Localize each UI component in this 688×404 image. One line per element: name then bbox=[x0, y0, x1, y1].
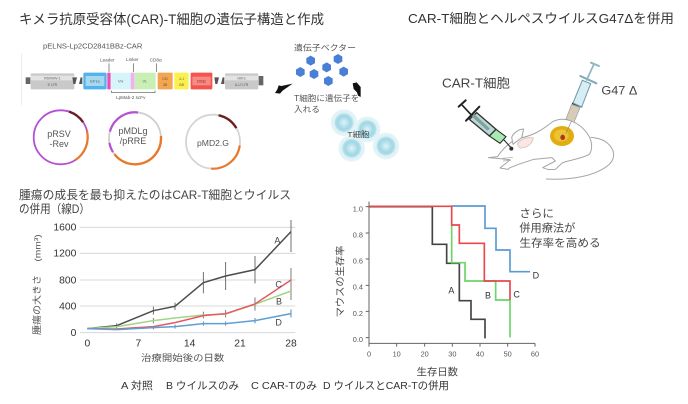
y axis labels bbox=[53, 222, 77, 339]
title: CAR construct: キメラ抗原受容体(CAR)-T細胞の遺伝子構造と作成 bbox=[19, 11, 324, 27]
callout: 生存率を高める bbox=[519, 237, 601, 250]
heading: tumor growth: の併用（線D） bbox=[19, 202, 90, 216]
legend caption: D ウイルスとCAR-Tの併用 bbox=[323, 379, 449, 392]
vector particles bbox=[296, 54, 348, 86]
x axis labels bbox=[84, 338, 297, 349]
legend caption bbox=[121, 379, 449, 392]
segment labels: Leader bbox=[100, 57, 115, 62]
curve C bbox=[369, 206, 510, 300]
curve A bbox=[369, 207, 485, 338]
CAR segments: CD bbox=[162, 77, 168, 81]
x axis title: 治療開始後の日数 bbox=[141, 352, 225, 363]
y ticks: 0.0 bbox=[353, 335, 363, 344]
y axis title: マウスの生存率 bbox=[334, 245, 346, 317]
EF1a promoter: EF1a bbox=[90, 79, 101, 84]
y axis title bbox=[31, 234, 43, 335]
arrow: into T cell bbox=[353, 82, 361, 97]
axes bbox=[366, 202, 535, 347]
label: insert gene: 入れる bbox=[294, 105, 320, 114]
segment labels: CD8α bbox=[150, 57, 162, 62]
diagram: gene map bbox=[22, 43, 263, 105]
title: combination therapy: CAR-T細胞とヘルペスウイルスG47Δを併用 bbox=[408, 11, 674, 26]
label: G47 delta: G47 Δ bbox=[601, 84, 637, 98]
CAR segments: BB bbox=[179, 83, 185, 87]
line A bbox=[87, 232, 291, 329]
heading: tumor growth bbox=[19, 188, 291, 216]
x ticks: 60 bbox=[531, 350, 539, 359]
plasmid name: pELNS-Lp2CD2841BBz-CAR bbox=[43, 43, 142, 50]
CAR segments: VL bbox=[143, 79, 148, 84]
y axis labels: 1600 bbox=[53, 222, 77, 233]
line D bbox=[87, 314, 291, 330]
line labels: C bbox=[275, 279, 282, 289]
x ticks: 50 bbox=[504, 350, 512, 359]
line chart: tumor volume bbox=[31, 220, 297, 363]
x axis labels: 14 bbox=[184, 338, 196, 349]
syringe: G47 delta bbox=[566, 63, 599, 133]
x ticks: 40 bbox=[476, 350, 484, 359]
line labels bbox=[274, 235, 282, 327]
line B bbox=[87, 291, 291, 329]
right LTR: Δ-U' LTR bbox=[235, 83, 249, 87]
curve D bbox=[452, 206, 530, 272]
diagram: vector production bbox=[275, 43, 399, 162]
tumor bbox=[550, 126, 574, 146]
callout: 併用療法が bbox=[519, 222, 576, 235]
right LTR bbox=[214, 73, 263, 89]
curve B bbox=[452, 225, 510, 337]
curve labels: D bbox=[533, 271, 540, 281]
callout bbox=[519, 208, 601, 250]
y ticks: 1.0 bbox=[353, 204, 363, 213]
curve labels bbox=[448, 271, 540, 301]
syringe: CAR-T bbox=[459, 100, 513, 151]
plasmid: pRSV-Rev: pRSV bbox=[47, 129, 71, 139]
arrow: into vector bbox=[275, 84, 293, 94]
plasmid: pMDLg/pRRE bbox=[99, 102, 171, 174]
left LTR: 5' LTR bbox=[48, 83, 58, 87]
x axis title: 生存日数 bbox=[417, 366, 458, 379]
CAR segments: 4-1 bbox=[179, 77, 184, 81]
y ticks: 0.4 bbox=[353, 283, 363, 292]
error bars bbox=[117, 220, 291, 329]
y axis labels: 800 bbox=[59, 275, 77, 286]
label: CAR-T: CAR-T細胞 bbox=[442, 76, 510, 90]
curve labels: C bbox=[513, 289, 520, 299]
line labels: D bbox=[275, 317, 282, 327]
x axis labels: 21 bbox=[234, 338, 246, 349]
x ticks: 10 bbox=[393, 350, 401, 359]
mouse bbox=[488, 119, 614, 179]
segment labels bbox=[100, 57, 162, 100]
x ticks: 30 bbox=[448, 350, 456, 359]
x axis labels: 7 bbox=[135, 338, 141, 349]
step chart: survival bbox=[334, 202, 601, 379]
line labels: A bbox=[274, 235, 280, 245]
CAR segments bbox=[107, 73, 212, 89]
y ticks: 0.2 bbox=[353, 309, 363, 318]
curve labels: A bbox=[448, 286, 454, 296]
plasmid: pMDLg/pRRE: /pRRE bbox=[120, 136, 146, 146]
legend caption: B ウイルスのみ bbox=[166, 380, 239, 392]
x ticks: 20 bbox=[421, 350, 429, 359]
CAR segments: CD3ζ bbox=[197, 80, 206, 84]
diagram: mouse treatment bbox=[442, 63, 637, 179]
segment labels: Linker bbox=[126, 57, 139, 62]
x ticks: 0 bbox=[367, 350, 371, 359]
CAR segments: VH bbox=[118, 79, 124, 84]
x axis labels: 0 bbox=[84, 338, 90, 349]
y ticks bbox=[353, 204, 363, 344]
segment labels: LpMab-2 scFv bbox=[116, 95, 146, 100]
CAR segments: 28 bbox=[163, 83, 167, 87]
x ticks bbox=[367, 350, 539, 359]
T cells: T細胞 bbox=[347, 130, 370, 139]
label: insert gene bbox=[294, 93, 359, 114]
line labels: B bbox=[276, 296, 282, 306]
left LTR bbox=[26, 73, 82, 89]
right LTR: HIV-1 bbox=[238, 77, 246, 81]
callout: さらに bbox=[519, 208, 554, 220]
left LTR: RSV/HIV-1 bbox=[44, 77, 61, 81]
y axis labels: 400 bbox=[59, 301, 77, 312]
label: insert gene: T細胞に遺伝子を bbox=[294, 93, 359, 103]
legend caption: C CAR-Tのみ bbox=[251, 380, 317, 392]
y ticks: 0.8 bbox=[353, 230, 363, 239]
heading: tumor growth: 腫瘍の成長を最も抑えたのはCAR-T細胞とウイルス bbox=[19, 188, 291, 202]
y axis title: (mm³) bbox=[33, 234, 43, 262]
y axis title: 腫瘍の大きさ bbox=[31, 275, 42, 335]
plasmid: pMDLg/pRRE: pMDLg bbox=[118, 126, 148, 136]
line C bbox=[87, 280, 291, 329]
label: gene vector: 遺伝子ベクター bbox=[294, 43, 356, 53]
y axis labels: 0 bbox=[71, 328, 77, 339]
EF1a promoter bbox=[83, 73, 107, 89]
legend caption: A 対照 bbox=[121, 379, 154, 392]
y ticks: 0.6 bbox=[353, 257, 363, 266]
x axis labels: 28 bbox=[285, 338, 297, 349]
plasmid: pRSV-Rev: -Rev bbox=[49, 139, 69, 149]
y axis labels: 1200 bbox=[53, 249, 77, 260]
curve labels: B bbox=[485, 291, 491, 301]
plasmid: pMD2.G bbox=[181, 110, 245, 174]
plasmid: pMD2.G: pMD2.G bbox=[197, 138, 229, 148]
plasmid: pRSV-Rev bbox=[27, 103, 95, 171]
